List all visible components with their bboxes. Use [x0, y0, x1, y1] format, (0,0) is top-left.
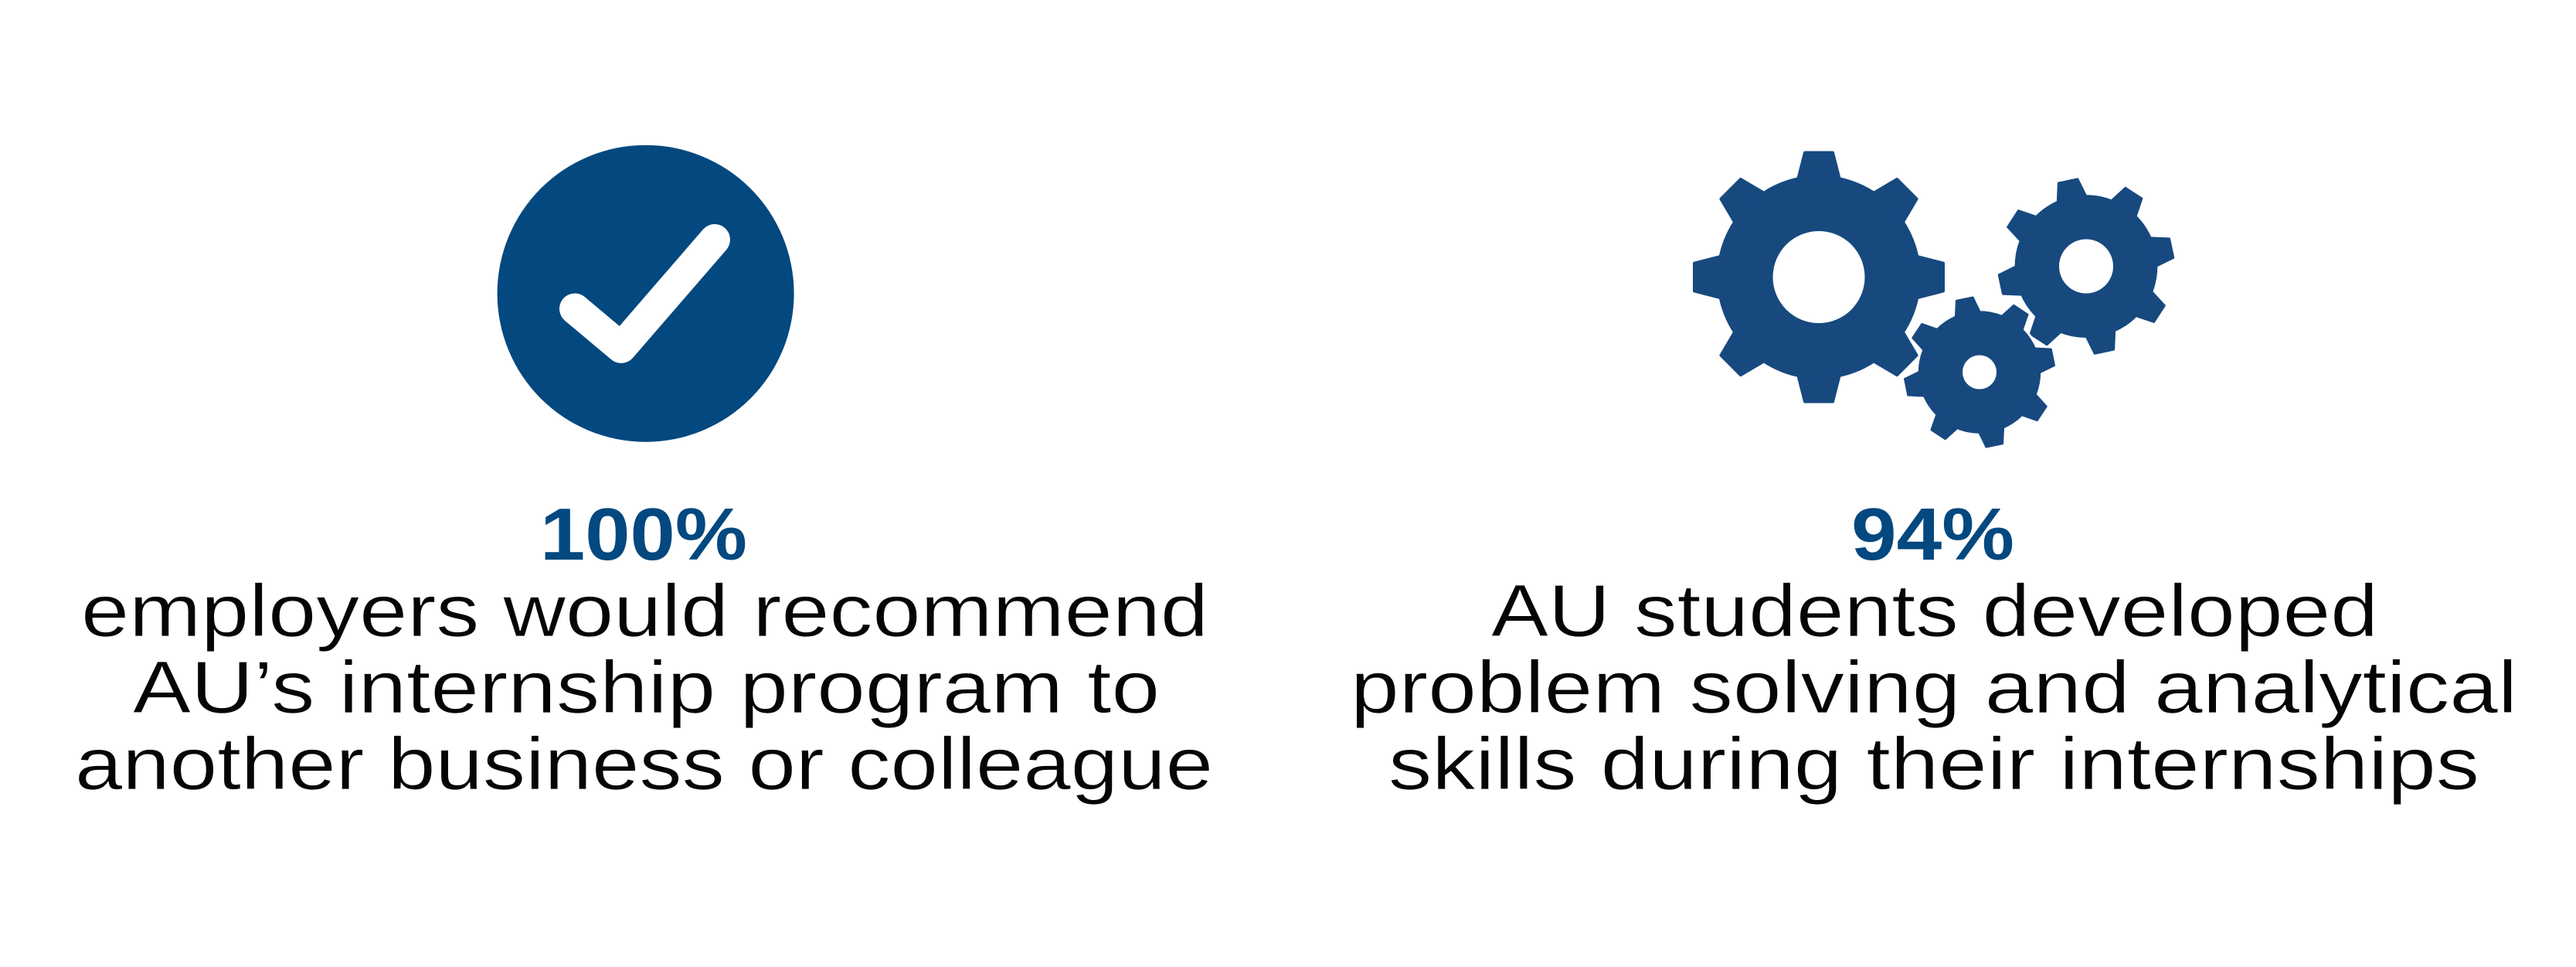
icon: three gears: [1694, 153, 2190, 460]
text block: employer recommendation description: another business or colleague: [75, 723, 1213, 805]
stat number: 94%: 94%: [1851, 493, 2014, 576]
text block: employer recommendation description: [75, 570, 1213, 805]
text block: employer recommendation description: AU’s internship program to: [133, 646, 1160, 729]
panel: problem solving skills stat: [1351, 153, 2517, 805]
text block: employer recommendation description: employers would recommend: [81, 570, 1208, 652]
stat number: 100%: 100%: [540, 493, 747, 576]
text block: problem solving description: [1351, 570, 2517, 805]
panel: employer recommendation stat: [75, 145, 1213, 805]
text block: problem solving description: problem solving and analytical: [1351, 646, 2517, 729]
icon: check mark in circle: [498, 145, 794, 442]
text block: problem solving description: skills during their internships: [1388, 723, 2479, 805]
text block: problem solving description: AU students developed: [1491, 570, 2378, 652]
